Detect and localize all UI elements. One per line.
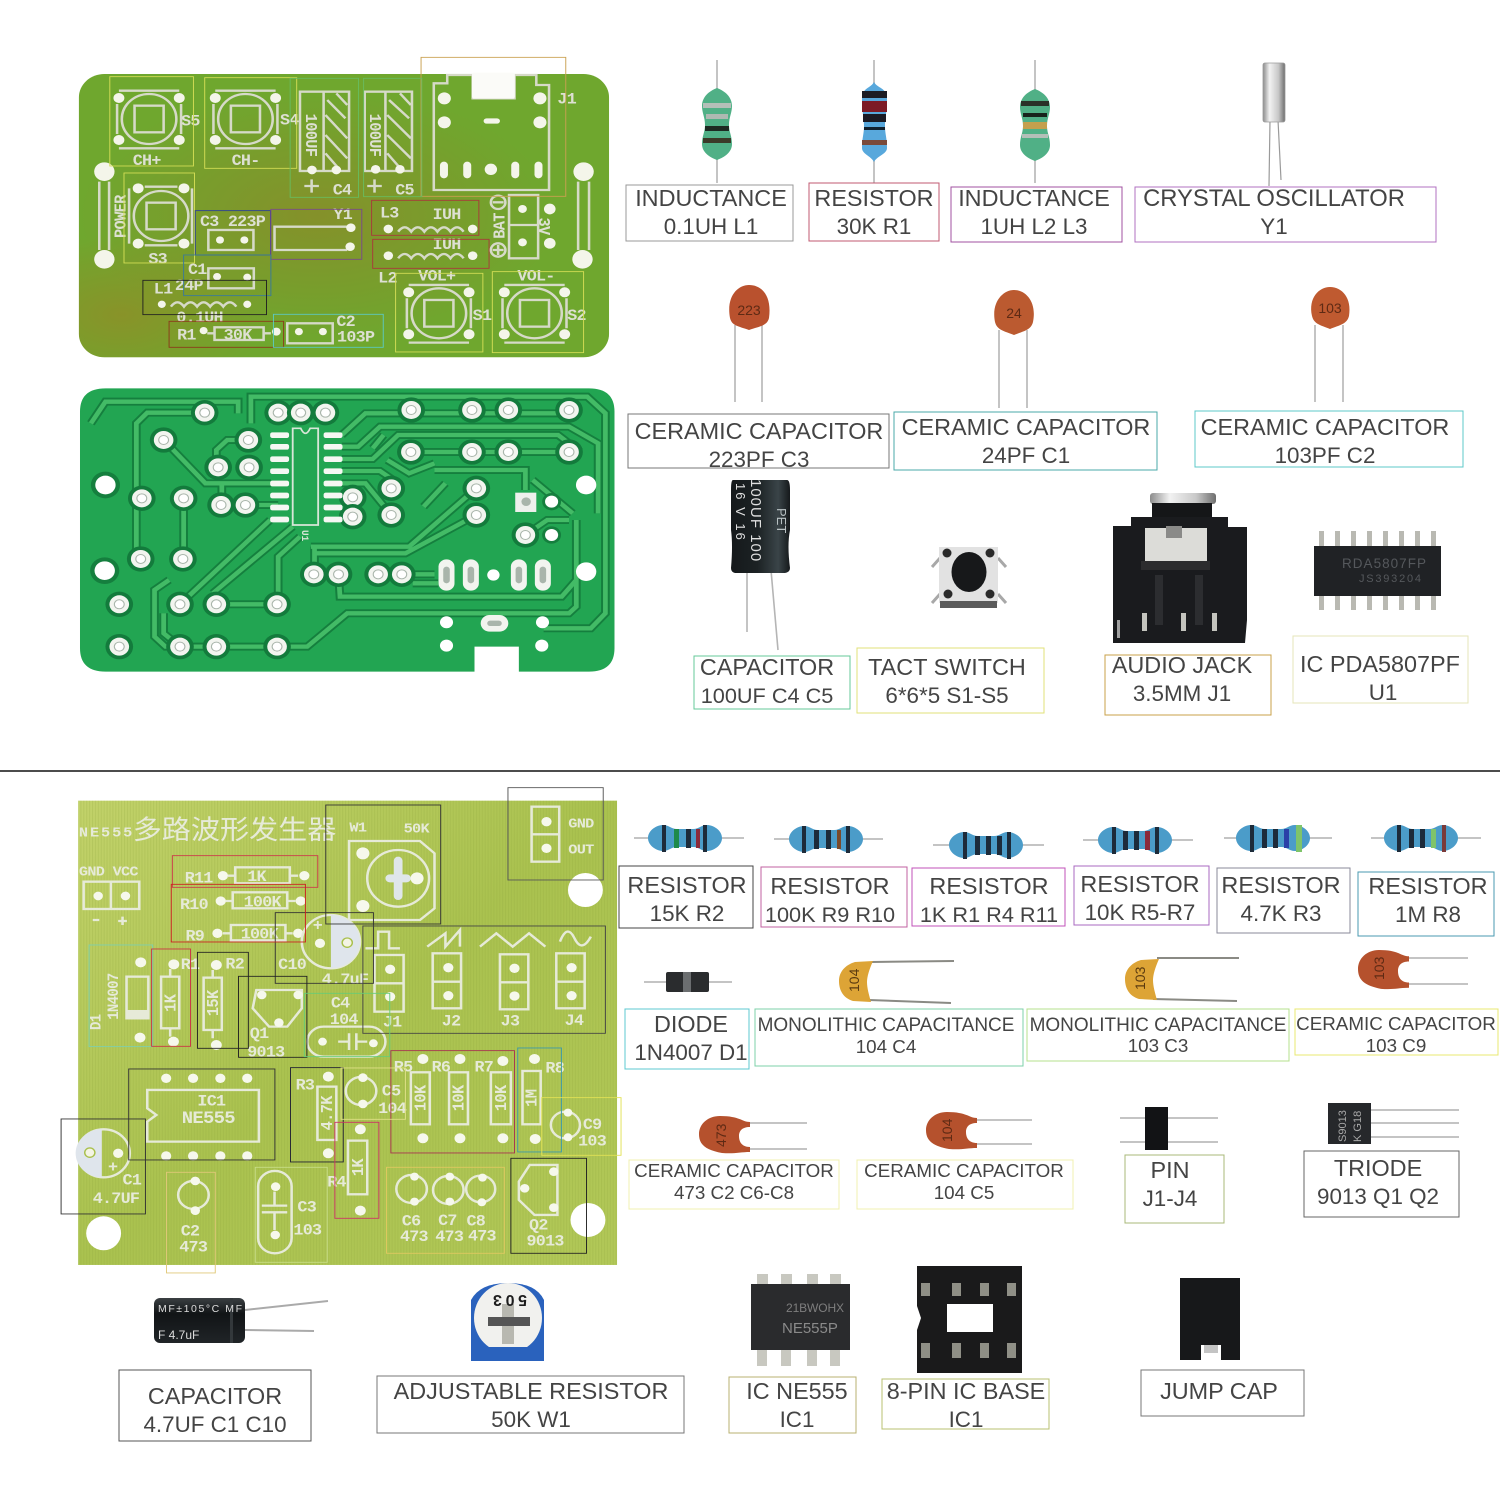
label: ceramic capacitor C3: CERAMIC CAPACITOR [635, 418, 883, 444]
label: resistor 30K [809, 183, 939, 241]
switch S1 [403, 268, 491, 343]
icon: ceramic capacitor 24 [994, 290, 1034, 408]
icon: ceramic capacitor 24: 24 [1006, 305, 1022, 321]
icon: electrolytic capacitor 4.7uF: F 4.7uF [158, 1328, 199, 1342]
resistor footprint R3: 4.7K [318, 1095, 337, 1130]
resistor footprint R8: 1M [523, 1090, 542, 1107]
icon: audio jack [1113, 493, 1247, 643]
IC U1 footprint [270, 428, 343, 541]
resistor footprint R11: 1K [247, 869, 267, 886]
label: ceramic capacitor 104: 104 C5 [934, 1182, 994, 1203]
switch S5 [113, 91, 200, 170]
icon: ceramic capacitor 223 [729, 285, 770, 402]
footprint C1: 24P [175, 278, 203, 295]
output connector: GND [568, 817, 595, 832]
label: IC PDA5807PF: IC PDA5807PF [1300, 651, 1460, 677]
icon: electrolytic capacitor 100uF: 100UF 100 [747, 479, 764, 562]
footprint L1: L1 [154, 281, 172, 298]
label: crystal oscillator: Y1 [1260, 214, 1288, 239]
label: ceramic capacitor C3 [628, 414, 889, 472]
label: inductance L1: 0.1UH L1 [664, 214, 758, 239]
resistor footprint R4 [327, 1124, 368, 1216]
footprint R1: 30K [224, 327, 253, 344]
switch S4: CH- [232, 153, 260, 170]
resistor footprint R1 [161, 957, 199, 1047]
icon: electrolytic capacitor 100uF: PET [774, 508, 789, 533]
label: jump cap [1141, 1370, 1304, 1416]
IC1 footprint: NE555 [182, 1110, 235, 1129]
trimmer footprint W1: W1 [349, 821, 367, 836]
label: jump cap: JUMP CAP [1160, 1378, 1278, 1404]
capacitor footprints C6 C7 C8 [396, 1173, 496, 1246]
label: ceramic capacitor 103 C9 [1295, 1009, 1498, 1056]
label: ceramic capacitor C2: CERAMIC CAPACITOR [1201, 414, 1449, 440]
diode footprint D1: 1N4007 [107, 973, 123, 1020]
label: ceramic capacitor 103 C9: 103 C9 [1366, 1035, 1426, 1056]
capacitor footprint C3: C3 [297, 1199, 316, 1216]
label: triode: 9013 Q1 Q2 [1317, 1184, 1439, 1209]
footprint L3: L3 [380, 205, 399, 222]
icon: ceramic capacitor 223: 223 [737, 302, 761, 318]
icon: electrolytic capacitor 100uF: 16 V 16 [733, 483, 748, 542]
label: resistor 15K: 15K R2 [650, 901, 724, 926]
divider line [0, 770, 1500, 772]
output connector [532, 807, 595, 862]
capacitor footprints C6 C7 C8: C8 [467, 1213, 485, 1230]
label: 8-pin IC base: 8-PIN IC BASE [887, 1378, 1045, 1404]
label: audio jack [1105, 652, 1271, 715]
footprint Y1 [275, 207, 356, 251]
resistor footprint R8: R8 [545, 1060, 564, 1077]
coloured annotation boxes [61, 788, 621, 1273]
footprint C1 [175, 262, 254, 295]
label: IC NE555 [729, 1377, 856, 1433]
capacitor footprint C5: C5 [395, 182, 414, 199]
trimmer footprint W1: 50K [404, 822, 430, 837]
label: ceramic capacitor C1: 24PF C1 [982, 443, 1070, 468]
label: monolithic capacitance 104: MONOLITHIC CAPACITANCE [758, 1015, 1014, 1036]
label: triode [1304, 1151, 1459, 1217]
label: ceramic capacitor 473 [629, 1160, 839, 1209]
label: resistor 30K: RESISTOR [814, 185, 934, 211]
footprint R1 [177, 327, 281, 344]
icon: ceramic capacitor 103: 103 [1318, 300, 1342, 316]
label: ceramic capacitor C2: 103PF C2 [1275, 443, 1375, 468]
switch S3 power [112, 183, 192, 268]
icon: IC NE555 [751, 1274, 850, 1366]
label: IC NE555: IC NE555 [746, 1378, 848, 1404]
panel: green PCB bottom side [80, 388, 614, 672]
label: crystal oscillator: CRYSTAL OSCILLATOR [1143, 185, 1405, 212]
icon: pin header [1120, 1107, 1218, 1150]
audio jack footprint J1 [434, 73, 576, 190]
footprint L2 [378, 237, 477, 287]
icon: tact switch [932, 547, 1006, 608]
capacitor footprint C4: C4 [331, 995, 351, 1012]
transistor footprint Q1 [247, 990, 303, 1061]
capacitor footprint C5: 100UF [365, 114, 383, 156]
label: capacitor 4.7UF [119, 1370, 311, 1441]
label: pin: J1-J4 [1143, 1186, 1197, 1211]
label: capacitor 100UF: 100UF C4 C5 [701, 683, 833, 708]
IC1 footprint [147, 1074, 259, 1161]
label: inductance L1: INDUCTANCE [635, 185, 787, 211]
label: IC PDA5807PF: U1 [1369, 680, 1397, 705]
resistor footprint R11: R11 [185, 870, 213, 887]
label: pin [1125, 1155, 1224, 1223]
footprint C1: C1 [188, 262, 207, 279]
battery connector: BAT [491, 212, 510, 239]
transistor footprint Q1: 9013 [247, 1044, 285, 1061]
resistor footprint R4: 1K [349, 1158, 368, 1176]
label: resistor 30K: 30K R1 [837, 214, 911, 239]
power connector: GND VCC [79, 865, 139, 880]
footprint L3 [380, 205, 477, 233]
label: audio jack: 3.5MM J1 [1133, 681, 1231, 706]
icon: electrolytic capacitor 4.7uF [154, 1298, 328, 1343]
coloured annotation boxes [110, 57, 584, 353]
jumper J3 with triangle wave: J3 [501, 1013, 519, 1030]
jumper J4 with sine wave [556, 932, 591, 1030]
icon: monolithic capacitor 104 [839, 961, 954, 1003]
label: resistor 10K: 10K R5-R7 [1085, 900, 1195, 925]
label: diode: 1N4007 D1 [634, 1040, 748, 1065]
label: resistor 1K: 1K R1 R4 R11 [920, 902, 1058, 927]
label: resistor 1K: RESISTOR [929, 873, 1049, 899]
footprint L1 [154, 281, 251, 327]
capacitor footprint C4 [307, 995, 385, 1057]
jumper J2 with sawtooth wave: J2 [442, 1013, 460, 1030]
transistor footprint Q2: Q2 [529, 1217, 548, 1234]
footprint Y1: Y1 [333, 207, 352, 224]
footprint L2: IUH [433, 237, 461, 254]
footprint L1: 0.1UH [176, 310, 223, 327]
capacitor footprint C4: 104 [330, 1012, 359, 1029]
resistor footprints R5 R6 R7: 10K [493, 1084, 511, 1111]
label: resistor 4.7K: RESISTOR [1221, 872, 1341, 898]
label: resistor 1M: RESISTOR [1368, 873, 1488, 899]
icon: adjustable resistor: 503 [493, 1291, 527, 1308]
trimmer footprint W1 [349, 821, 435, 920]
label: resistor 1M: 1M R8 [1395, 902, 1461, 927]
switch S2: S2 [567, 308, 586, 325]
resistor footprints R5 R6 R7: R7 [475, 1059, 493, 1076]
capacitor footprints C6 C7 C8: 473 [400, 1229, 428, 1246]
audio jack footprint J1: J1 [557, 91, 576, 108]
switch S4: S4 [280, 112, 300, 129]
resistor footprint R3 [296, 1072, 337, 1158]
label: ceramic capacitor C3: 223PF C3 [709, 447, 809, 472]
capacitor footprint C3 [258, 1171, 321, 1253]
switch S3 power: POWER [112, 194, 131, 238]
IC1 footprint: IC1 [197, 1093, 225, 1110]
label: ceramic capacitor 103 C9: CERAMIC CAPACITOR [1296, 1013, 1496, 1034]
output connector: OUT [568, 843, 595, 858]
icon: IC PDA5807 [1314, 531, 1441, 610]
resistor footprint R2: 15K [205, 989, 223, 1016]
capacitor footprint C1: + [108, 1159, 117, 1176]
jumper J1 with square wave [365, 932, 404, 1031]
switch S5: S5 [181, 113, 200, 130]
battery connector: 3V [534, 217, 553, 236]
icon: inductor L1 [702, 60, 732, 183]
resistor footprints R5 R6 R7: R6 [432, 1059, 450, 1076]
capacitor footprints C6 C7 C8: 473 [435, 1229, 463, 1246]
switch S2: VOL- [517, 268, 555, 285]
panel: yellow-green waveform generator PCB [61, 788, 621, 1273]
label: resistor 10K: RESISTOR [1080, 871, 1200, 897]
capacitor footprint C1: C1 [123, 1172, 141, 1189]
switch S1: VOL+ [418, 268, 455, 285]
icon: ceramic capacitor 103 C9: 103 [1371, 956, 1387, 980]
battery connector [491, 195, 556, 258]
icon: 8-pin IC base [917, 1266, 1022, 1373]
capacitor footprint C2 [178, 1177, 209, 1256]
board mounting holes [86, 873, 605, 1250]
label: ceramic capacitor C1: CERAMIC CAPACITOR [902, 414, 1150, 440]
icon: IC PDA5807: JS393204 [1359, 573, 1421, 585]
oval pads [439, 559, 551, 632]
icon: ceramic capacitor 473: 473 [713, 1123, 729, 1147]
switch S3 power: S3 [148, 251, 167, 268]
icon: ceramic capacitor 473 [699, 1116, 807, 1153]
icon: crystal oscillator [1263, 63, 1285, 186]
label: resistor 1K [912, 868, 1065, 927]
resistor footprints R5 R6 R7 [394, 1054, 511, 1143]
resistor footprint R3: R3 [296, 1077, 314, 1094]
label: resistor 1M [1358, 872, 1494, 936]
icon: diode [644, 972, 732, 992]
label: pin: PIN [1150, 1157, 1190, 1183]
label: inductance L2 L3: 1UH L2 L3 [980, 214, 1088, 239]
switch S5: CH+ [133, 153, 161, 170]
label: resistor 100K [761, 867, 907, 927]
square pad and drill holes [90, 472, 596, 652]
label: tact switch: 6*6*5 S1-S5 [885, 683, 1009, 708]
resistor footprint R9 [185, 925, 303, 945]
label: tact switch: TACT SWITCH [868, 654, 1026, 680]
resistor footprint R11 [185, 867, 309, 887]
capacitor footprint C1 [76, 1129, 141, 1208]
footprint C2: 103P [337, 329, 374, 346]
diode footprint D1: D1 [89, 1014, 106, 1030]
capacitor footprint C4: 100UF [301, 114, 319, 156]
icon: resistor 15K [634, 825, 744, 852]
footprint C3 [200, 214, 265, 250]
jumper J1 with square wave: J1 [383, 1014, 402, 1031]
label: diode [625, 1009, 749, 1069]
label: ceramic capacitor C2 [1195, 411, 1463, 468]
label: resistor 100K: 100K R9 R10 [765, 902, 895, 927]
icon: monolithic capacitor 103: 103 [1132, 966, 1148, 990]
transistor footprint Q2: 9013 [526, 1233, 564, 1250]
footprint L3: IUH [433, 207, 461, 224]
icon: ceramic capacitor 104: 104 [939, 1118, 955, 1142]
label: resistor 15K [619, 866, 753, 928]
icon: ceramic capacitor 103 [1311, 287, 1350, 402]
label: resistor 10K [1074, 866, 1209, 925]
icon: electrolytic capacitor 4.7uF: MF±105°C MF [158, 1303, 242, 1315]
capacitor footprint C9: 103 [578, 1133, 606, 1150]
label: resistor 4.7K: 4.7K R3 [1241, 901, 1321, 926]
jumper J3 with triangle wave [480, 933, 545, 1030]
panel: green PCB top side [79, 57, 609, 357]
label: monolithic capacitance 103: 103 C3 [1128, 1035, 1188, 1056]
capacitor footprint C3: 103 [293, 1222, 321, 1239]
icon: resistor 10K [1083, 827, 1193, 854]
icon: jump cap [1180, 1278, 1240, 1361]
icon: adjustable resistor [471, 1283, 544, 1361]
resistor footprint R1: 1K [162, 994, 181, 1012]
switch S4 [210, 91, 300, 170]
footprint L2: L2 [378, 270, 397, 287]
label: monolithic capacitance 104: 104 C4 [856, 1036, 916, 1057]
resistor footprint R8 [522, 1054, 564, 1144]
icon: ceramic capacitor 103 C9 [1358, 950, 1468, 989]
label: audio jack: AUDIO JACK [1112, 652, 1253, 678]
solder pads [105, 397, 583, 659]
label: adjustable resistor: 50K W1 [491, 1407, 571, 1432]
diode footprint D1 [89, 957, 148, 1043]
capacitor footprint C5 [346, 1073, 407, 1118]
capacitor footprint C9 [551, 1109, 606, 1150]
label: capacitor 100UF [694, 654, 850, 709]
resistor footprint R9: R9 [185, 928, 204, 945]
resistor footprints R5 R6 R7: 10K [412, 1084, 431, 1111]
capacitor footprint C4 [300, 92, 352, 199]
label: 8-pin IC base [882, 1378, 1049, 1432]
label: tact switch [857, 648, 1044, 713]
capacitor footprint C2: 473 [179, 1239, 207, 1256]
resistor footprints R5 R6 R7: R5 [394, 1059, 412, 1076]
resistor footprint R2 [204, 956, 244, 1050]
label: ceramic capacitor C1 [894, 412, 1157, 470]
capacitor footprint C10: + [313, 918, 322, 935]
footprint C2: C2 [336, 314, 355, 331]
label: 8-pin IC base: IC1 [949, 1407, 983, 1432]
board title: 多路波形发生器 [133, 815, 336, 845]
icon: monolithic capacitor 103 [1125, 958, 1239, 1001]
jumper J2 with sawtooth wave [427, 930, 461, 1030]
capacitor footprint C5: C5 [382, 1083, 400, 1100]
resistor footprint R10: 100K [244, 894, 282, 911]
resistor footprint R2: R2 [225, 956, 244, 973]
footprint C3: C3 223P [200, 214, 265, 231]
icon: IC NE555: NE555P [782, 1320, 838, 1337]
resistor footprint R1: R1 [181, 957, 199, 974]
icon: resistor R1 [862, 60, 887, 183]
capacitor footprint C5 [365, 92, 414, 199]
icon: resistor 1K [933, 832, 1044, 859]
icon: resistor 4.7K [1224, 825, 1332, 852]
capacitor footprint C10 [278, 915, 368, 989]
label: monolithic capacitance 104 [755, 1009, 1023, 1066]
label: triode: TRIODE [1334, 1155, 1422, 1181]
icon: resistor 1M [1371, 825, 1481, 852]
label: ceramic capacitor 473: 473 C2 C6-C8 [674, 1182, 794, 1203]
icon: resistor 100K [774, 826, 883, 853]
capacitor footprint C4: C4 [333, 182, 352, 199]
label: capacitor 4.7UF: 4.7UF C1 C10 [143, 1412, 287, 1437]
icon: IC PDA5807: RDA5807FP [1342, 556, 1426, 571]
label: resistor 4.7K [1217, 868, 1350, 933]
label: ceramic capacitor 104: CERAMIC CAPACITOR [864, 1160, 1064, 1181]
label: resistor 15K: RESISTOR [627, 872, 747, 898]
label: inductance L1 [626, 185, 793, 241]
resistor footprints R5 R6 R7: 10K [450, 1084, 469, 1111]
label: adjustable resistor: ADJUSTABLE RESISTOR [394, 1378, 668, 1404]
label: crystal oscillator [1135, 185, 1436, 242]
capacitor footprint C2: C2 [181, 1223, 199, 1240]
capacitor footprint C5: 104 [378, 1101, 407, 1118]
icon: transistor 9013 [1328, 1103, 1459, 1144]
footprint R1: R1 [177, 327, 196, 344]
jumper J4 with sine wave: J4 [565, 1013, 584, 1030]
footprint C2 [287, 314, 374, 346]
capacitor footprint C1: 4.7UF [93, 1191, 139, 1208]
resistor footprint R9: 100K [241, 926, 279, 943]
label: IC NE555: IC1 [780, 1407, 814, 1432]
capacitor footprint C10: 4.7uF [322, 972, 368, 989]
label: monolithic capacitance 103 [1027, 1009, 1289, 1061]
capacitor footprints C6 C7 C8: C7 [438, 1213, 457, 1230]
capacitor footprint C9: C9 [583, 1117, 602, 1134]
transistor footprint Q2 [519, 1165, 564, 1250]
resistor footprint R4: R4 [327, 1174, 347, 1191]
label: capacitor 100UF: CAPACITOR [700, 654, 834, 680]
icon: transistor 9013: K G18 [1352, 1111, 1364, 1142]
IC U1 footprint: U1 [299, 530, 310, 541]
switch S1: S1 [473, 308, 491, 325]
label: diode: DIODE [654, 1011, 728, 1037]
copper traces [91, 397, 605, 647]
label: ceramic capacitor 104 [857, 1160, 1073, 1209]
icon: transistor 9013: S9013 [1337, 1110, 1349, 1142]
transistor footprint Q1: Q1 [250, 1026, 268, 1043]
resistor footprint R10 [180, 892, 306, 914]
switch S2 [499, 268, 586, 343]
icon: electrolytic capacitor 100uF [731, 479, 790, 650]
label: ceramic capacitor 473: CERAMIC CAPACITOR [634, 1160, 834, 1181]
label: resistor 100K: RESISTOR [770, 873, 890, 899]
icon: ceramic capacitor 104 [926, 1112, 1032, 1149]
power connector [79, 865, 139, 925]
icon: inductor L2 L3 [1020, 60, 1050, 183]
mounting holes [94, 162, 594, 269]
label: inductance L2 L3: INDUCTANCE [958, 185, 1110, 211]
label: capacitor 4.7UF: CAPACITOR [148, 1383, 282, 1409]
capacitor footprint C10: C10 [278, 957, 306, 974]
resistor footprint R10: R10 [180, 897, 208, 914]
label: inductance L2 L3 [951, 185, 1122, 242]
capacitor footprints C6 C7 C8: 473 [468, 1228, 496, 1245]
icon: monolithic capacitor 104: 104 [846, 968, 862, 992]
label: adjustable resistor [377, 1376, 684, 1433]
label: IC PDA5807PF [1293, 636, 1468, 705]
capacitor footprints C6 C7 C8: C6 [402, 1213, 420, 1230]
icon: IC NE555: 21BWOHX [786, 1301, 844, 1315]
label: monolithic capacitance 103: MONOLITHIC CAPACITANCE [1030, 1015, 1286, 1036]
board title: NE555 [79, 826, 133, 841]
